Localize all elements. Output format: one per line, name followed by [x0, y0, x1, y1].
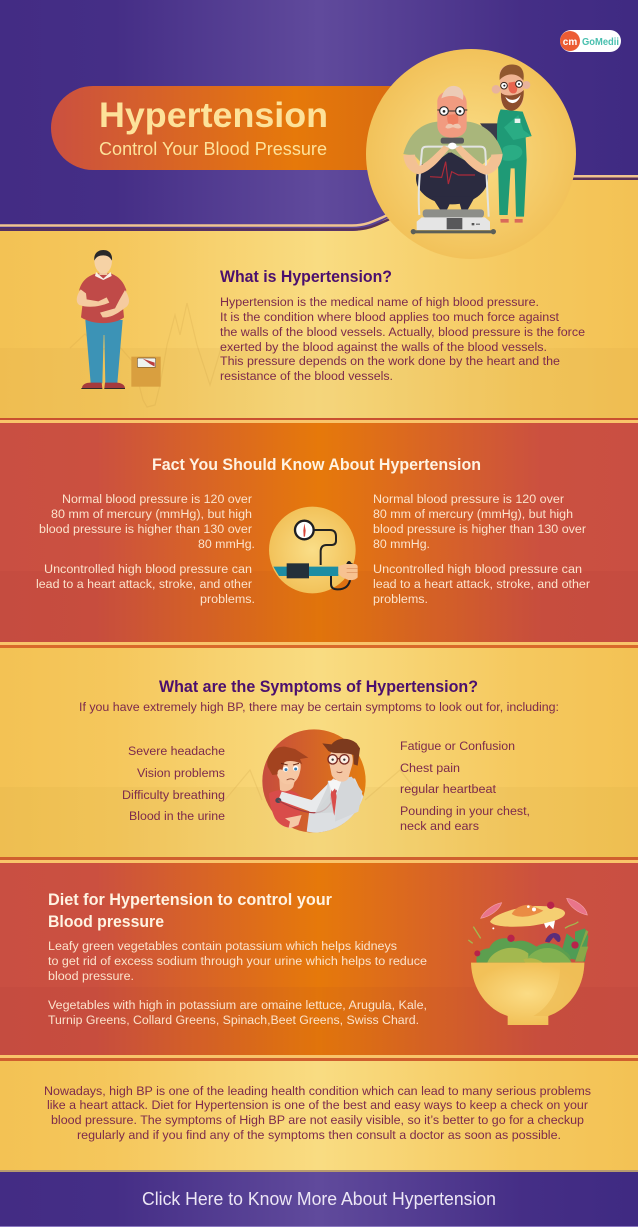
paragraph: to get rid of excess sodium through your urine which helps to reduce [48, 954, 427, 968]
icon: GoMedii logo: GoMedii [582, 37, 619, 48]
panel: closing section [0, 1061, 638, 1172]
panel: footer call to action [0, 1172, 638, 1227]
left symptoms list: Blood in the urine [129, 809, 225, 823]
right symptoms list: regular heartbeat [400, 782, 497, 796]
panel: title banner [51, 86, 400, 170]
left symptoms list: Difficulty breathing [122, 788, 225, 802]
panel: what is hypertension background [0, 175, 638, 420]
left facts: Normal blood pressure is 120 over [62, 492, 252, 506]
heading: What are the Symptoms of Hypertension? [159, 678, 478, 696]
icon: blood pressure monitor [269, 507, 358, 593]
right facts: Normal blood pressure is 120 over [373, 492, 564, 506]
paragraph: Leafy green vegetables contain potassium which helps kidneys [48, 939, 397, 953]
closing paragraph: Nowadays, high BP is one of the leading health condition which can lead to many serious problems [44, 1084, 591, 1098]
right symptoms list: neck and ears [400, 819, 479, 833]
text block: what is hypertension [220, 267, 585, 383]
right facts [373, 492, 590, 606]
panel: facts section [0, 418, 638, 650]
paragraph: exerted by the blood against the walls of the blood vessels. [220, 340, 547, 354]
right facts: 80 mm of mercury (mmHg), but high [373, 507, 573, 521]
right facts: blood pressure is higher than 130 over [373, 522, 586, 536]
heading: Blood pressure [48, 913, 164, 931]
paragraph: It is the condition where blood applies too much force against [220, 310, 560, 324]
paragraph [220, 295, 585, 383]
panel: symptoms section [0, 645, 638, 863]
left facts: 80 mmHg. [198, 537, 255, 551]
call to action text: Click Here to Know More About Hypertension [142, 1189, 496, 1209]
illustration: doctor examining patient [262, 729, 366, 833]
icon: GoMedii logo [560, 30, 621, 52]
left symptoms list: Severe headache [128, 744, 225, 758]
subtitle: Control Your Blood Pressure [99, 138, 327, 159]
panel: header background [0, 0, 638, 232]
left facts: Uncontrolled high blood pressure can [44, 562, 252, 576]
right symptoms list: Fatigue or Confusion [400, 739, 515, 753]
paragraph [48, 939, 427, 1027]
left facts [36, 492, 255, 606]
paragraph: blood pressure. [48, 969, 134, 983]
right symptoms list: Pounding in your chest, [400, 804, 530, 818]
closing paragraph: blood pressure. The symptoms of High BP are not easily visible, so it’s better to go for a checkup [51, 1113, 584, 1127]
left symptoms list: Vision problems [137, 766, 225, 780]
paragraph: Turnip Greens, Collard Greens, Spinach,Beet Greens, Swiss Chard. [48, 1013, 419, 1027]
intro text: If you have extremely high BP, there may be certain symptoms to look out for, including: [79, 700, 559, 714]
illustration: salad bowl [468, 898, 588, 1025]
left facts: problems. [200, 592, 255, 606]
left facts: 80 mm of mercury (mmHg), but high [51, 507, 252, 521]
paragraph: Hypertension is the medical name of high blood pressure. [220, 295, 539, 309]
illustration: patient on scale with doctor [366, 49, 576, 259]
title: Hypertension [99, 96, 328, 135]
paragraph: the walls of the blood vessels. Actually, blood pressure is the force [220, 325, 585, 339]
panel: diet section [0, 863, 638, 1061]
heading [48, 891, 333, 931]
paragraph: This pressure depends on the work done by the heart and the [220, 354, 560, 368]
heading: What is Hypertension? [220, 267, 392, 286]
paragraph: resistance of the blood vessels. [220, 369, 393, 383]
right facts: problems. [373, 592, 428, 606]
left symptoms list [122, 744, 225, 823]
icon: GoMedii logo: cm [563, 37, 577, 48]
closing paragraph [44, 1084, 591, 1142]
heading: Diet for Hypertension to control your [48, 891, 333, 909]
doctor [480, 64, 532, 223]
paragraph: Vegetables with high in potassium are omaine lettuce, Arugula, Kale, [48, 998, 427, 1012]
left facts: blood pressure is higher than 130 over [39, 522, 252, 536]
closing paragraph: regularly and if you find any of the symptoms then consult a doctor as soon as possible. [77, 1128, 561, 1142]
right symptoms list [400, 739, 530, 833]
closing paragraph: like a heart attack. Diet for Hypertension is one of the best and easy ways to keep a check on your [47, 1098, 588, 1112]
left facts: lead to a heart attack, stroke, and other [36, 577, 252, 591]
right facts: lead to a heart attack, stroke, and other [373, 577, 590, 591]
heading: Fact You Should Know About Hypertension [152, 456, 481, 474]
illustration: overweight man and bathroom scale [77, 250, 161, 389]
right facts: 80 mmHg. [373, 537, 430, 551]
patient [403, 86, 503, 234]
right facts: Uncontrolled high blood pressure can [373, 562, 582, 576]
right symptoms list: Chest pain [400, 761, 460, 775]
